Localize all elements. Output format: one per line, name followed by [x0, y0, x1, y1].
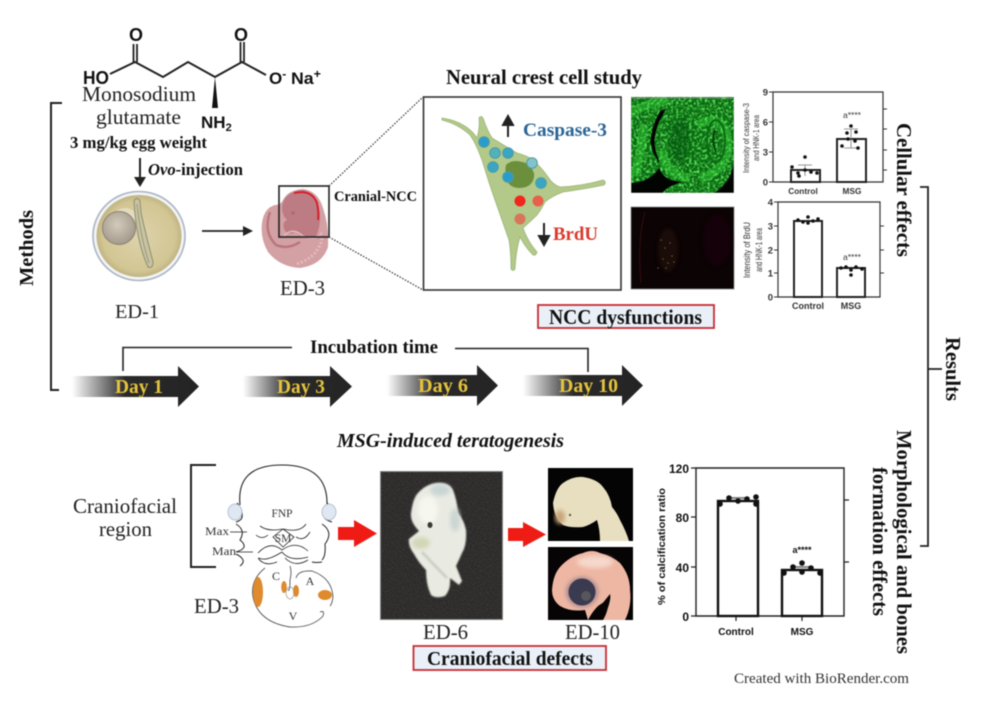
diagram: craniofacial schematic: Max — [205, 526, 229, 538]
bar chart: caspase-3 intensity: 9 — [763, 88, 768, 98]
label: ED-3 schematic: ED-3 — [194, 595, 239, 618]
label: ED-1: ED-1 — [115, 301, 159, 323]
heart outline — [252, 566, 333, 627]
bar chart: BrdU intensity: a**** — [843, 252, 862, 262]
micrograph: BrdU red — [631, 207, 734, 289]
chemical structure: monosodium glutamate: HO — [83, 68, 109, 88]
heading: Methods: Methods — [16, 210, 38, 286]
diagram: craniofacial schematic: Man — [212, 546, 236, 558]
bar chart: caspase-3 intensity: 3 — [763, 148, 768, 158]
nucleus — [505, 161, 534, 188]
heading: MSG-induced teratogenesis: MSG-induced teratogenesis — [336, 430, 564, 452]
arrow: Day 1: Day 1 — [115, 376, 163, 398]
icon: ED-1 egg dish — [93, 192, 185, 280]
label: Monosodium glutamate: glutamate — [96, 105, 181, 129]
bar chart: BrdU intensity: Control — [792, 301, 824, 311]
label: ED-6: ED-6 — [423, 621, 468, 644]
label: Ovo-injection: Ovo-injection — [148, 160, 244, 179]
diagram: craniofacial schematic — [205, 465, 336, 627]
arrow: Day 3 — [243, 366, 352, 407]
bar chart: caspase-3 intensity: 0 — [763, 178, 768, 188]
label: Craniofacial region — [73, 494, 177, 541]
chemical structure: monosodium glutamate: 2 — [226, 122, 232, 134]
label: BrdU: BrdU — [553, 224, 598, 245]
bar chart: calcification ratio: 0 — [682, 610, 689, 624]
arrow: Day 10: Day 10 — [559, 375, 618, 397]
micrograph: caspase-3 green — [631, 97, 734, 193]
photo: ED-10 lower embryo — [548, 547, 633, 620]
label: Craniofacial region: region — [99, 517, 152, 541]
heading: Cellular effects: Cellular effects — [892, 123, 916, 257]
diagram: craniofacial schematic: A — [306, 574, 315, 588]
heading: Neural crest cell study: Neural crest cell study — [446, 67, 643, 89]
bar chart: calcification ratio: % of calcification ratio — [657, 488, 668, 605]
callout: NCC dysfunctions: NCC dysfunctions — [549, 306, 702, 329]
chemical structure: monosodium glutamate — [83, 25, 321, 134]
bar chart: BrdU intensity: 2 — [768, 246, 773, 256]
arrow: red to ED-10 — [508, 522, 546, 547]
timeline: incubation time brackets — [123, 348, 588, 372]
arrow: Day 6: Day 6 — [418, 375, 468, 397]
chemical structure: monosodium glutamate: O — [234, 25, 248, 45]
arrow: Day 6 — [387, 365, 498, 406]
diagram: craniofacial schematic: FNP — [271, 508, 293, 520]
bar chart: caspase-3 intensity: and HNK-1 area — [751, 115, 761, 161]
chemical structure: monosodium glutamate: - — [282, 67, 286, 81]
bar chart: caspase-3 intensity — [741, 88, 887, 196]
bar chart: calcification ratio — [657, 462, 849, 638]
panel: neural crest cell — [424, 97, 621, 290]
bar chart: BrdU intensity: and HNK-1 area — [754, 228, 764, 272]
bar chart: calcification ratio: a**** — [792, 545, 812, 555]
credit: BioRender: Created with BioRender.com — [734, 671, 909, 687]
arrow: Day 10 — [523, 365, 643, 406]
heading: Morphological and bones formation effects: Morphological and bones — [892, 430, 916, 654]
arrow: Day 3: Day 3 — [277, 376, 325, 398]
BrdU granules — [514, 196, 526, 206]
bar chart: calcification ratio: MSG — [791, 627, 814, 638]
bar chart: BrdU intensity: Intensity of BrdU — [742, 222, 752, 278]
caspase-3 granules — [479, 137, 546, 188]
arrow: BrdU down — [539, 223, 549, 245]
bar chart: calcification ratio: 80 — [676, 511, 689, 525]
chemical structure: monosodium glutamate: O — [269, 69, 282, 88]
bar chart: BrdU intensity — [742, 198, 884, 311]
label: ED-10: ED-10 — [565, 622, 620, 644]
bar chart: BrdU intensity: 3 — [768, 222, 773, 232]
arrow: red to ED-6 — [338, 520, 377, 547]
heading: Morphological and bones formation effects: formation effects — [868, 467, 892, 616]
bracket: craniofacial region — [191, 465, 216, 567]
heading: Morphological and bones formation effects — [868, 430, 916, 654]
bar chart: caspase-3 intensity: Control — [788, 186, 818, 196]
bar chart: BrdU intensity: 4 — [768, 198, 774, 208]
diagram: craniofacial schematic: C — [272, 569, 280, 583]
bracket: methods — [51, 103, 62, 390]
bar chart: caspase-3 intensity: MSG — [843, 186, 861, 196]
arrow: caspase-3 up — [503, 116, 513, 137]
arrow: ED-1 to ED-3 — [202, 226, 253, 236]
callout: Craniofacial defects: Craniofacial defects — [427, 649, 593, 670]
diagram: craniofacial schematic: V — [289, 609, 298, 623]
bar chart: caspase-3 intensity: a**** — [843, 110, 862, 120]
dose label: 3 mg/kg egg weight — [70, 133, 207, 152]
icon: ED-3 embryo — [262, 189, 328, 268]
label: Monosodium glutamate: Monosodium — [82, 82, 196, 106]
bar chart: calcification ratio: 40 — [676, 561, 689, 575]
label: Craniofacial region: Craniofacial — [73, 494, 177, 518]
label: Incubation time: Incubation time — [310, 337, 438, 358]
label: Cranial-NCC: Cranial-NCC — [334, 189, 417, 205]
arrow: ovo-injection — [134, 158, 146, 187]
bar chart: BrdU intensity: 1 — [768, 268, 774, 280]
photo: ED-10 upper embryo — [548, 468, 633, 541]
bar chart: BrdU intensity: 0 — [768, 292, 773, 304]
bar chart: BrdU intensity: MSG — [841, 301, 861, 311]
arrow: Day 1 — [72, 366, 199, 407]
zoom guide lines — [329, 97, 423, 290]
photo: ED-6 embryo — [380, 471, 503, 620]
bar chart: caspase-3 intensity: Intensity of caspase-3 — [741, 103, 751, 173]
selection box: cranial region — [279, 186, 329, 237]
chemical structure: monosodium glutamate: NH — [201, 113, 226, 132]
label: ED-3: ED-3 — [280, 277, 325, 300]
bracket: results — [920, 187, 942, 546]
chemical structure: monosodium glutamate: O — [129, 25, 143, 45]
bar chart: calcification ratio: 120 — [669, 462, 689, 476]
cell body — [442, 116, 605, 270]
heading: Results: Results — [941, 337, 965, 401]
diagram: craniofacial schematic: SM — [275, 533, 291, 545]
chemical structure: monosodium glutamate: + — [314, 67, 321, 81]
bar chart: caspase-3 intensity: 6 — [763, 118, 768, 128]
bar chart: calcification ratio: Control — [718, 627, 754, 638]
label: Monosodium glutamate — [82, 82, 196, 129]
chemical structure: monosodium glutamate: Na — [291, 69, 313, 88]
label: Caspase-3: Caspase-3 — [523, 120, 607, 141]
